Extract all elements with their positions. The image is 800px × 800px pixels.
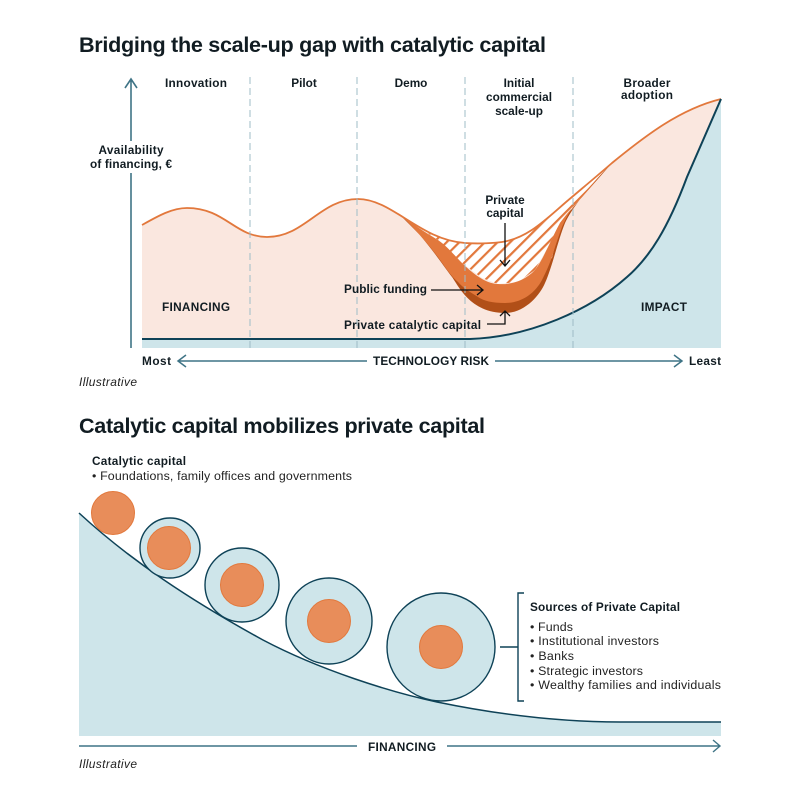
private catalytic capital band <box>398 163 612 313</box>
y axis arrow <box>125 79 137 348</box>
y axis label: Availability <box>98 143 164 157</box>
note: illustrative: Illustrative <box>79 375 137 389</box>
stage labels: Initial <box>504 76 534 90</box>
slope <box>79 513 721 736</box>
impact area <box>142 99 721 348</box>
stage labels: Broader <box>624 76 671 90</box>
bracket <box>500 593 524 701</box>
text: sources of private capital: • Banks <box>530 649 574 663</box>
y axis label <box>90 143 172 171</box>
circle 5 <box>387 593 495 701</box>
circle 4 <box>286 578 372 664</box>
impact curve <box>142 99 721 339</box>
callout: private catalytic capital <box>344 311 510 332</box>
text: sources of private capital: • Wealthy families and individuals <box>530 678 721 692</box>
callout: private catalytic capital: Private catalytic capital <box>344 318 481 332</box>
callout: public funding: Public funding <box>344 282 427 296</box>
text: sources of private capital <box>530 600 721 692</box>
text: sources of private capital: • Strategic investors <box>530 664 643 678</box>
text: sources of private capital: • Institutional investors <box>530 634 659 648</box>
callout: private capital: Private <box>485 193 525 207</box>
stage labels: adoption <box>621 88 673 102</box>
title: mobilizes: Catalytic capital mobilizes private capital <box>79 413 485 438</box>
text: catalytic capital <box>92 454 352 483</box>
text: sources of private capital: • Funds <box>530 620 573 634</box>
area label: impact: IMPACT <box>641 300 688 314</box>
circle 3 <box>205 548 279 622</box>
circle 1 <box>92 492 134 534</box>
x axis: Most <box>142 354 171 368</box>
area label: financing: FINANCING <box>162 300 230 314</box>
x axis: Least <box>689 354 721 368</box>
callout: private capital: capital <box>486 206 524 220</box>
stage labels: Demo <box>395 76 427 90</box>
financing area <box>142 99 721 339</box>
callout: public funding <box>344 282 483 296</box>
text: catalytic capital: Catalytic capital <box>92 454 186 468</box>
circle 2 <box>140 518 200 578</box>
chart: scale-up gap <box>90 76 721 368</box>
text: catalytic capital: • Foundations, family offices and governments <box>92 469 352 483</box>
note: illustrative: Illustrative <box>79 757 137 771</box>
public funding band <box>398 163 612 303</box>
stage labels <box>165 76 673 118</box>
stage dividers <box>250 77 573 348</box>
financing arrow: FINANCING <box>368 740 436 754</box>
text: sources of private capital: Sources of Private Capital <box>530 600 680 614</box>
financing curve <box>142 99 721 243</box>
stage labels: commercial <box>486 90 552 104</box>
stage labels: Pilot <box>291 76 317 90</box>
stage labels: Innovation <box>165 76 227 90</box>
x axis <box>142 354 721 368</box>
callout: private capital <box>485 193 525 266</box>
x axis: TECHNOLOGY RISK <box>373 354 489 368</box>
private capital hatched area <box>412 163 612 284</box>
stage labels: scale-up <box>495 104 543 118</box>
title: scale-up gap: Bridging the scale-up gap with catalytic capital <box>79 32 546 57</box>
y axis label: of financing, € <box>90 157 172 171</box>
financing arrow <box>79 740 720 754</box>
